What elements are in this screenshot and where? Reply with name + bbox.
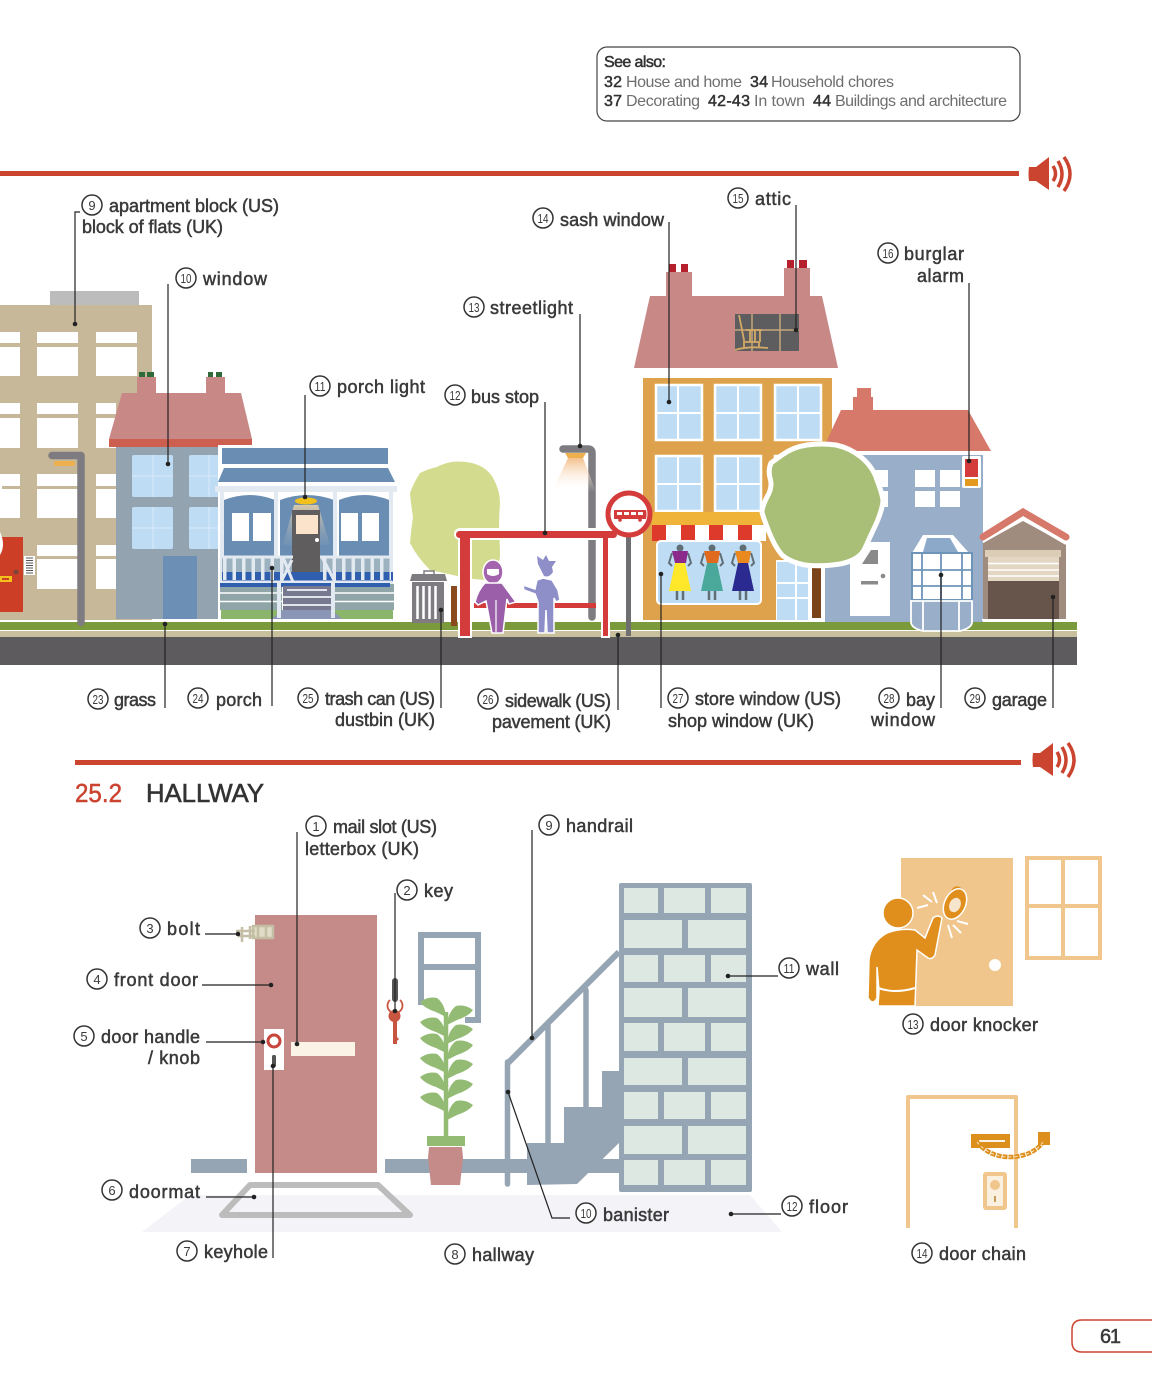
page number: 61	[1100, 1326, 1121, 1348]
icon: speaker top	[1028, 157, 1070, 191]
label 12 bus stop: 12	[450, 388, 460, 403]
label 9 handrail: handrail	[566, 816, 633, 836]
label 13 door knocker: 13	[908, 1017, 918, 1032]
person knocking	[868, 898, 942, 1006]
label 26 sidewalk: sidewalk (US)	[505, 691, 611, 711]
label 7 keyhole: keyhole	[204, 1242, 268, 1262]
person in hijab	[475, 560, 516, 633]
label 11 porch light: porch light	[337, 377, 425, 397]
bolt	[236, 926, 273, 942]
icon: speaker hallway	[1032, 743, 1074, 777]
hallway illustration	[142, 883, 782, 1232]
label 28 bay window: 28	[884, 691, 894, 706]
label 5 door handle	[74, 1026, 265, 1068]
label 6 doormat: doormat	[129, 1182, 200, 1202]
label 26 sidewalk: pavement (UK)	[492, 712, 611, 732]
label 26 sidewalk	[478, 633, 620, 732]
label 29 garage	[965, 595, 1055, 710]
see also box: Decorating	[626, 93, 700, 110]
label 8 hallway: hallway	[472, 1245, 534, 1265]
bay window	[911, 535, 972, 631]
knocker and impact lines	[917, 885, 971, 938]
label 25 trash can: trash can (US)	[325, 689, 435, 709]
left street lamp	[52, 456, 81, 622]
heading: hallway	[75, 778, 264, 808]
label 8 hallway: 8	[451, 1247, 459, 1262]
large green tree	[762, 444, 883, 618]
label 16 burglar alarm: alarm	[917, 266, 964, 286]
see also box: In town	[754, 93, 805, 110]
label 1 mail slot	[295, 816, 437, 1046]
blue house	[822, 388, 991, 631]
label 2 key: 2	[403, 883, 411, 898]
label 11 wall: wall	[805, 959, 839, 979]
bus stop sign	[608, 493, 650, 636]
label 11 wall	[726, 958, 839, 979]
label 13 door knocker: door knocker	[930, 1015, 1038, 1035]
label 1 mail slot: 1	[312, 819, 320, 834]
person with spiky hair	[523, 555, 560, 633]
label 10 window	[166, 268, 268, 466]
see also box	[597, 47, 1020, 121]
label 15 attic: 15	[732, 191, 744, 206]
house with red roof	[109, 372, 252, 619]
label 24 porch: porch	[216, 690, 262, 710]
label 8 hallway	[445, 1244, 534, 1265]
label 10 banister: 10	[580, 1206, 592, 1221]
window	[1027, 858, 1100, 958]
pot plant	[420, 998, 473, 1185]
bus stop shelter	[454, 528, 620, 638]
label 9 apartment block: apartment block (US)	[109, 196, 279, 216]
keys	[388, 978, 403, 1044]
label 1 mail slot: letterbox (UK)	[305, 839, 419, 859]
top rule	[0, 171, 1019, 176]
mannequin teal	[701, 544, 723, 600]
hallway rule	[75, 760, 1021, 765]
apartment block	[0, 291, 152, 620]
label 10 banister	[506, 1090, 669, 1225]
label 14 sash window	[533, 208, 671, 404]
label 27 store window: shop window (UK)	[668, 711, 814, 731]
red entrance door	[0, 532, 35, 612]
label 14 door chain: 14	[916, 1246, 928, 1261]
light green tree	[410, 462, 500, 626]
label 25 trash can	[298, 608, 443, 730]
label 3 bolt: 3	[146, 921, 154, 936]
label 11 porch light: 11	[314, 379, 326, 394]
trash can	[410, 571, 447, 623]
page number	[1072, 1320, 1152, 1352]
porch railing	[222, 557, 393, 582]
heading: hallway: 25.2	[75, 778, 122, 808]
mannequin yellow	[669, 544, 691, 600]
label 9 apartment block: 9	[88, 198, 96, 213]
label 29 garage: garage	[992, 690, 1047, 710]
heading: hallway: HALLWAY	[146, 778, 264, 808]
label 12 floor: 12	[786, 1199, 798, 1214]
label 3 bolt: bolt	[167, 919, 200, 939]
label 10 window: 10	[180, 271, 192, 286]
label 28 bay window: bay	[906, 690, 935, 710]
label 2 key: key	[424, 881, 453, 901]
porch steps and brick base	[220, 582, 394, 619]
orange townhouse	[634, 260, 838, 620]
label 4 front door	[87, 969, 273, 990]
label 14 sash window: 14	[538, 211, 548, 226]
label 16 burglar alarm	[878, 243, 971, 463]
door knocker illustration	[868, 858, 1100, 1006]
label 1 mail slot: mail slot (US)	[333, 817, 437, 837]
label 13 streetlight: 13	[468, 300, 480, 315]
label 13 streetlight: streetlight	[490, 298, 573, 318]
porch house	[215, 445, 398, 621]
label 15 attic: attic	[755, 189, 791, 209]
label 7 keyhole: 7	[183, 1244, 191, 1259]
label 23 grass: 23	[92, 692, 104, 707]
see also box: Buildings and architecture	[835, 93, 1007, 110]
label 12 floor	[729, 1196, 848, 1217]
label 2 key	[393, 880, 453, 1013]
label 29 garage: 29	[970, 691, 980, 706]
label 26 sidewalk: 26	[482, 692, 494, 707]
label 24 porch	[188, 566, 274, 710]
see also box: 42-43	[708, 93, 750, 110]
label 27 store window	[659, 572, 841, 731]
see also box: See also:	[604, 54, 666, 71]
label 7 keyhole	[177, 1064, 275, 1262]
skirting boards	[191, 1159, 625, 1173]
street scene	[0, 260, 1077, 665]
shop window with mannequins	[657, 541, 761, 604]
label 10 banister: banister	[603, 1205, 669, 1225]
label 4 front door: front door	[114, 970, 198, 990]
label 6 doormat: 6	[108, 1183, 116, 1198]
shop awning	[652, 512, 766, 541]
label 5 door handle: / knob	[148, 1048, 200, 1068]
doormat	[222, 1185, 410, 1215]
garage	[982, 512, 1068, 621]
door chain illustration	[908, 1097, 1050, 1228]
ground: grass, sidewalk, road	[0, 622, 1077, 665]
see also box: 34	[750, 74, 768, 91]
see also box: 44	[813, 93, 831, 110]
label 12 floor: floor	[809, 1197, 848, 1217]
attic window	[735, 314, 799, 351]
see also box: House and home	[626, 74, 742, 91]
mannequin navy	[732, 544, 754, 600]
see also box: 32	[604, 74, 622, 91]
label 27 store window: store window (US)	[695, 689, 841, 709]
label 9 apartment block	[73, 195, 279, 326]
floor	[142, 1195, 782, 1232]
label 28 bay window: window	[870, 710, 936, 730]
see also box: Household chores	[771, 74, 894, 91]
label 27 store window: 27	[672, 691, 684, 706]
label 9 handrail: 9	[545, 818, 553, 833]
brick wall	[619, 883, 752, 1192]
label 4 front door: 4	[93, 972, 101, 987]
door handle plate	[264, 1029, 284, 1070]
hall window frame	[421, 935, 478, 1020]
label 6 doormat	[102, 1180, 256, 1202]
white front door	[850, 542, 890, 616]
label 14 door chain: door chain	[939, 1244, 1026, 1264]
label 12 bus stop: bus stop	[471, 387, 539, 407]
label 23 grass: grass	[114, 690, 156, 710]
label 11 porch light	[303, 376, 425, 499]
label 12 bus stop	[445, 385, 547, 535]
label 14 sash window: sash window	[560, 210, 665, 230]
mail slot	[291, 1042, 355, 1056]
label 16 burglar alarm: burglar	[904, 244, 964, 264]
label 3 bolt	[140, 918, 240, 939]
label 15 attic	[728, 188, 798, 332]
label 10 window: window	[202, 269, 268, 289]
label 9 handrail	[530, 815, 633, 1040]
label 24 porch: 24	[192, 691, 204, 706]
label 28 bay window	[870, 573, 943, 730]
staircase and handrail	[508, 952, 620, 1185]
label 25 trash can: dustbin (UK)	[335, 710, 435, 730]
label 13 streetlight	[464, 297, 582, 448]
label 5 door handle: 5	[80, 1029, 88, 1044]
label 23 grass	[88, 622, 167, 710]
label 11 wall: 11	[784, 961, 794, 976]
label 9 apartment block: block of flats (UK)	[82, 217, 223, 237]
burglar alarm box	[962, 456, 981, 488]
label 25 trash can: 25	[302, 691, 314, 706]
label 5 door handle: door handle	[101, 1027, 200, 1047]
see also box: 37	[604, 93, 622, 110]
front door	[255, 915, 377, 1173]
label 16 burglar alarm: 16	[882, 246, 894, 261]
right street light	[552, 449, 596, 617]
